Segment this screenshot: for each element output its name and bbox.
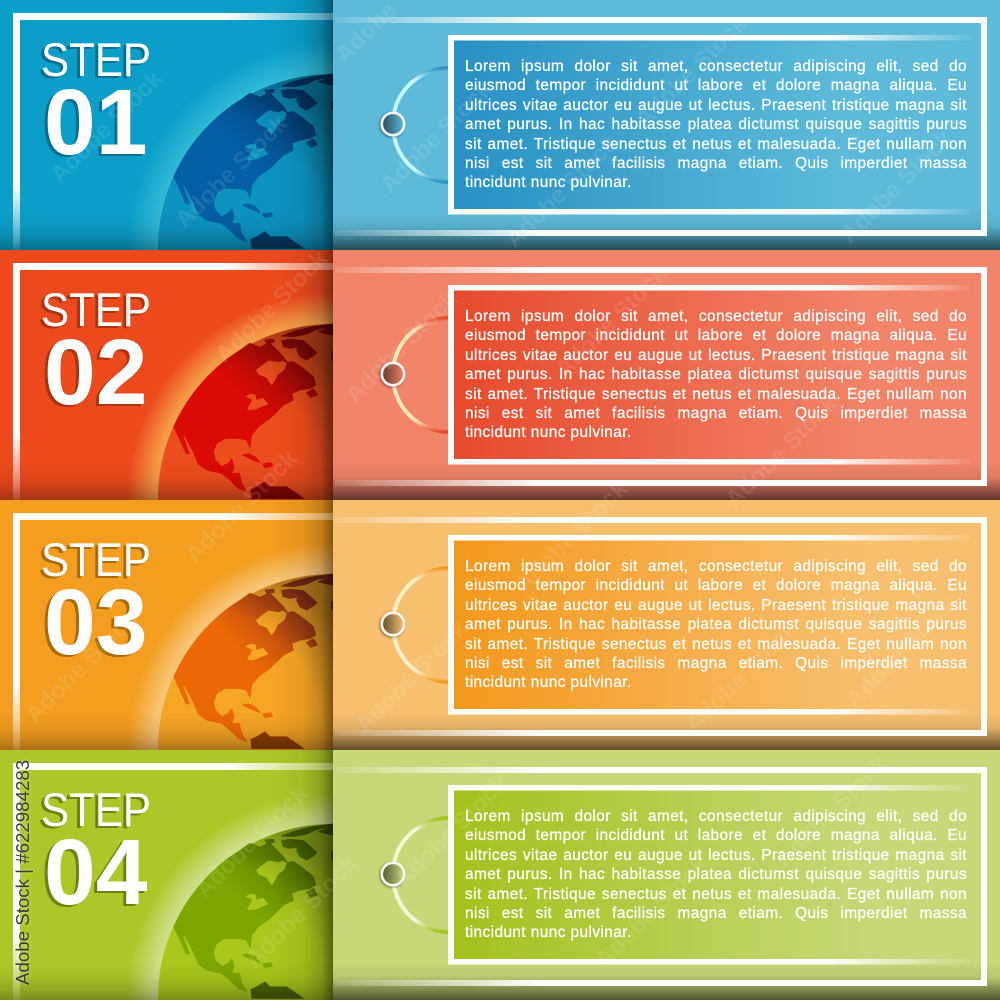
heading: STEP 04: 04	[44, 820, 148, 924]
right panel: step 03 background	[333, 500, 1000, 750]
icon: globe 03	[127, 543, 333, 750]
panel: step 04	[0, 750, 1000, 1000]
text block 04: nisi est sit amet facilisis magna etiam. Quis imperdiet massa	[465, 905, 967, 922]
text block 01: nisi est sit amet facilisis magna etiam. Quis imperdiet massa	[465, 155, 967, 172]
text block 02	[465, 308, 967, 441]
text block 02: Lorem ipsum dolor sit amet, consectetur adipiscing elit, sed do	[465, 308, 967, 325]
watermarks: Adobe Stock	[180, 445, 303, 568]
text block 02: ultrices vitae auctor eu augue ut lectus. Praesent tristique magna sit	[465, 347, 967, 364]
watermarks: Adobe Stock	[835, 125, 958, 248]
right frame 01	[335, 17, 987, 236]
heading: STEP 02: STEP	[41, 283, 151, 336]
text block 01: Lorem ipsum dolor sit amet, consectetur adipiscing elit, sed do	[465, 58, 967, 75]
text block 02: eiusmod tempor incididunt ut labore et dolore magna aliqua. Eu	[465, 327, 967, 344]
heading: STEP 01: STEP	[41, 33, 151, 86]
right frame 02	[335, 267, 987, 486]
watermarks: Adobe Stock	[510, 475, 633, 598]
text block 03: eiusmod tempor incididunt ut labore et dolore magna aliqua. Eu	[465, 577, 967, 594]
heading: STEP 01	[41, 33, 151, 174]
text block 03: sit amet. Tristique senectus et netus et malesuada. Eget nullam non	[465, 636, 967, 653]
text block 02: nisi est sit amet facilisis magna etiam. Quis imperdiet massa	[465, 405, 967, 422]
heading: STEP 03: STEP	[41, 533, 151, 586]
connector arc 02	[393, 318, 448, 432]
panel: step 02	[0, 250, 1000, 500]
connector node 02	[382, 363, 404, 385]
left panel: step 04 background	[0, 750, 333, 1000]
text block 01: ultrices vitae auctor eu augue ut lectus. Praesent tristique magna sit	[465, 97, 967, 114]
text box 03	[448, 535, 976, 714]
text block 03: nisi est sit amet facilisis magna etiam. Quis imperdiet massa	[465, 655, 967, 672]
left panel: step 02 background	[0, 250, 333, 500]
text block 02: amet purus. In hac habitasse platea dictumst quisque sagittis purus	[465, 366, 967, 383]
text block 03: tincidunt nunc pulvinar.	[465, 674, 632, 691]
watermarks: Adobe Stock	[550, 260, 673, 383]
credit: vertical stock id: Adobe Stock | #622984283	[12, 760, 33, 985]
panel: step 03	[0, 500, 1000, 750]
text block 02: sit amet. Tristique senectus et netus et malesuada. Eget nullam non	[465, 386, 967, 403]
icon: globe 02	[127, 293, 333, 500]
left frame 02	[13, 263, 333, 500]
connector arc 03	[393, 568, 448, 682]
watermarks: Adobe Stock	[500, 130, 623, 253]
text block 04: eiusmod tempor incididunt ut labore et dolore magna aliqua. Eu	[465, 827, 967, 844]
text block 04: Lorem ipsum dolor sit amet, consectetur adipiscing elit, sed do	[465, 808, 967, 825]
text box 01	[448, 35, 976, 214]
left panel: step 03 background	[0, 500, 333, 750]
watermarks: Adobe Stock	[170, 110, 293, 233]
watermarks: Adobe Stock	[590, 850, 713, 973]
watermarks: Adobe Stock	[45, 65, 168, 188]
connector arc 04	[393, 818, 448, 932]
text block 02: tincidunt nunc pulvinar.	[465, 424, 632, 441]
text block 03: Lorem ipsum dolor sit amet, consectetur adipiscing elit, sed do	[465, 558, 967, 575]
watermarks: Adobe Stock	[840, 590, 963, 713]
text block 04: amet purus. In hac habitasse platea dictumst quisque sagittis purus	[465, 866, 967, 883]
heading: STEP 01: 01	[44, 70, 147, 174]
heading: STEP 03	[41, 533, 151, 674]
text box 04	[448, 785, 976, 964]
text block 01: eiusmod tempor incididunt ut labore et dolore magna aliqua. Eu	[465, 77, 967, 94]
right panel: step 01 background	[333, 0, 1000, 250]
panel: step 01	[0, 0, 1000, 250]
watermarks: Adobe Stock	[680, 615, 803, 738]
text block 04	[465, 808, 967, 941]
left frame 03	[13, 513, 333, 750]
text block 04: sit amet. Tristique senectus et netus et malesuada. Eget nullam non	[465, 886, 967, 903]
text block 04: ultrices vitae auctor eu augue ut lectus. Praesent tristique magna sit	[465, 847, 967, 864]
text block 03: amet purus. In hac habitasse platea dictumst quisque sagittis purus	[465, 616, 967, 633]
watermarks: Adobe Stock	[720, 390, 843, 513]
watermarks: Adobe Stock	[340, 285, 463, 408]
right panel: step 02 background	[333, 250, 1000, 500]
text block 01: sit amet. Tristique senectus et netus et malesuada. Eget nullam non	[465, 136, 967, 153]
heading: STEP 02	[41, 283, 151, 424]
watermarks: Adobe Stock	[350, 615, 473, 738]
watermarks: Adobe Stock	[240, 850, 363, 973]
right frame 04	[335, 767, 987, 986]
connector node 03	[382, 613, 404, 635]
text block 04: tincidunt nunc pulvinar.	[465, 924, 632, 941]
text block 01: tincidunt nunc pulvinar.	[465, 174, 632, 191]
watermarks: Adobe Stock	[630, 10, 753, 133]
heading: STEP 04: STEP	[41, 783, 151, 836]
watermarks: Adobe Stock	[210, 245, 333, 368]
text box 02	[448, 285, 976, 464]
watermarks: Adobe Stock	[20, 605, 143, 728]
text block 01	[465, 58, 967, 191]
left frame 01	[13, 13, 333, 250]
heading: STEP 04	[41, 783, 151, 924]
connector arc 01	[393, 68, 448, 182]
icon: globe 01	[127, 43, 333, 250]
connector node 04	[382, 863, 404, 885]
text block 03: ultrices vitae auctor eu augue ut lectus. Praesent tristique magna sit	[465, 597, 967, 614]
watermarks: Adobe Stock	[770, 750, 893, 873]
right frame 03	[335, 517, 987, 736]
icon: globe 04	[127, 793, 333, 1000]
text block 03	[465, 558, 967, 691]
text block 01: amet purus. In hac habitasse platea dictumst quisque sagittis purus	[465, 116, 967, 133]
watermarks: Adobe Stock	[390, 770, 513, 893]
watermarks: Adobe Stock	[190, 780, 313, 903]
left panel: step 01 background	[0, 0, 333, 250]
left frame 04	[13, 763, 333, 1000]
right panel: step 04 background	[333, 750, 1000, 1000]
heading: STEP 02: 02	[44, 320, 147, 424]
connector node 01	[382, 113, 404, 135]
heading: STEP 03: 03	[44, 570, 147, 674]
watermarks: Adobe Stock	[375, 75, 498, 198]
